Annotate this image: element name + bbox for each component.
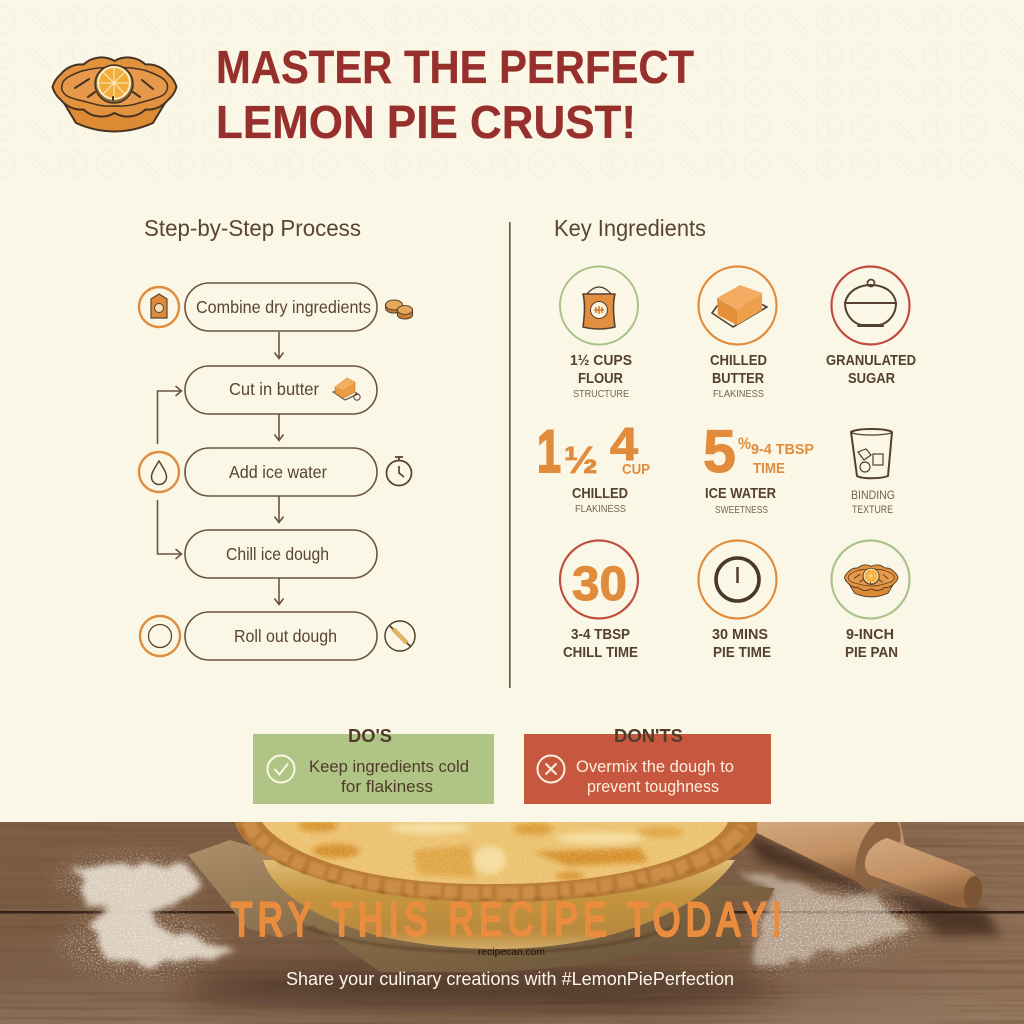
- flour: [70, 864, 912, 966]
- panel: do's: Keep ingredients cold: [309, 757, 469, 776]
- ingredient stat: ice water 5: ICE WATER: [705, 486, 776, 502]
- pie dish side: [263, 860, 735, 949]
- ingredient stat: chilled 1 1/2 4 cup: FLAKINESS: [575, 503, 626, 515]
- title: [216, 41, 694, 148]
- step 5: roll out dough: Roll out dough: [234, 626, 337, 646]
- step 1: combine dry ingredients: [185, 283, 377, 331]
- ingredient stat: chilled 1 1/2 4 cup: CHILLED: [572, 486, 628, 502]
- ingredient: chilled butter: FLAKINESS: [713, 388, 764, 400]
- ingredient: chilled butter: BUTTER: [712, 371, 764, 387]
- step 2: cut in butter: [185, 366, 377, 414]
- step 5: roll out dough: [185, 612, 377, 660]
- ingredient stat: chilled 1 1/2 4 cup: 4: [610, 418, 638, 470]
- panel: don'ts: Overmix the dough to: [576, 757, 734, 776]
- ingredient: pie time clock: [698, 540, 776, 661]
- heading: key ingredients: Key Ingredients: [554, 215, 706, 241]
- panel: don'ts: [524, 726, 771, 804]
- panel: key ingredients grid: [537, 266, 916, 661]
- ingredient stat: chilled 1 1/2 4 cup: [537, 418, 650, 515]
- rolling pin shadow: [745, 832, 1000, 935]
- ingredient: ice glass: [851, 429, 895, 516]
- ingredient: 30 chill time: 3-4 TBSP: [571, 627, 630, 643]
- icon: cross mark: [538, 756, 564, 782]
- ingredient: flour: [560, 266, 638, 400]
- step 4: chill ice dough: Chill ice dough: [226, 544, 329, 564]
- arrows between steps: [274, 332, 284, 604]
- ingredient stat: ice water 5: 5: [703, 418, 736, 485]
- ingredient: 30 chill time: 30: [572, 558, 627, 611]
- panel: do's: DO'S: [348, 726, 392, 746]
- rolling pin: [756, 822, 982, 908]
- ingredient: pie pan: [832, 540, 910, 661]
- step 2: cut in butter: Cut in butter: [229, 379, 319, 399]
- ingredient: 30 chill time: CHILL TIME: [563, 645, 638, 661]
- ingredient: pie pan: 9-INCH: [846, 627, 894, 643]
- ingredient: chilled butter: [698, 266, 776, 400]
- icon: water drop badge: [139, 452, 179, 492]
- ingredient stat: ice water 5: TIME: [753, 460, 785, 477]
- ingredient stat: ice water 5: 9-4 TBSP: [751, 441, 814, 458]
- ingredient stat: ice water 5: [703, 418, 814, 516]
- divider: [509, 222, 511, 688]
- title: LEMON PIE CRUST!: [216, 96, 636, 148]
- panel: do's: [253, 726, 494, 804]
- share hashtag line: Share your culinary creations with #LemonPiePerfection: [286, 969, 734, 989]
- panel: don'ts: DON'TS: [614, 726, 683, 746]
- ingredient stat: chilled 1 1/2 4 cup: ½: [564, 440, 598, 482]
- photo: pie on wooden table: [0, 810, 1024, 1024]
- icon: stopwatch: [386, 457, 412, 486]
- ingredient: flour: FLOUR: [578, 371, 623, 387]
- ingredient: pie time clock: 30 MINS: [712, 627, 768, 643]
- icon: butter pats: [386, 300, 412, 319]
- ingredient: ice glass: BINDING: [851, 488, 895, 502]
- step 3: add ice water: [185, 448, 377, 496]
- step 4: chill ice dough: [185, 530, 377, 578]
- ingredient: chilled butter: CHILLED: [710, 353, 767, 369]
- ingredient: flour: STRUCTURE: [573, 388, 629, 400]
- ingredient: granulated sugar: GRANULATED: [826, 353, 916, 369]
- call to action: TRY THIS RECIPE TODAY!: [231, 893, 782, 946]
- step 1: combine dry ingredients: Combine dry ingredients: [196, 297, 371, 317]
- panel: don'ts: prevent toughness: [587, 777, 719, 796]
- icon: lemon pie: [52, 57, 176, 132]
- ingredient stat: chilled 1 1/2 4 cup: 1: [537, 418, 561, 485]
- ingredient: granulated sugar: [826, 266, 916, 387]
- ingredient: pie time clock: PIE TIME: [713, 645, 771, 661]
- wood table: [0, 822, 1024, 1024]
- arrow: loop to cut in butter: [158, 386, 182, 444]
- icon: rolling pin badge: [385, 621, 415, 651]
- icon: flour bag badge: [139, 287, 179, 327]
- ingredient stat: chilled 1 1/2 4 cup: CUP: [622, 461, 650, 478]
- ingredient stat: ice water 5: SWEETNESS: [715, 504, 768, 516]
- icon: check mark: [268, 756, 294, 782]
- ingredient stat: ice water 5: %: [738, 434, 751, 453]
- ingredient: ice glass: TEXTURE: [852, 504, 893, 516]
- ingredient: flour: 1½ CUPS: [570, 353, 632, 369]
- pie crust: [235, 822, 757, 902]
- ingredient: 30 chill time: [560, 540, 638, 661]
- icon: dough circle badge: [140, 616, 180, 656]
- step 3: add ice water: Add ice water: [229, 462, 327, 482]
- icon: butter stick: [333, 378, 360, 400]
- ingredient: granulated sugar: SUGAR: [848, 371, 895, 387]
- panel: step-by-step flowchart: [139, 283, 415, 660]
- pie filling: [262, 822, 728, 884]
- ingredient: pie pan: PIE PAN: [845, 645, 898, 661]
- title: MASTER THE PERFECT: [216, 41, 694, 93]
- panel: do's: for flakiness: [341, 777, 433, 796]
- watermark: recipecan.com: [478, 947, 545, 958]
- arrow: loop to chill dough: [158, 500, 182, 559]
- burlap cloth: [188, 840, 775, 972]
- heading: step-by-step process: Step-by-Step Process: [144, 215, 361, 241]
